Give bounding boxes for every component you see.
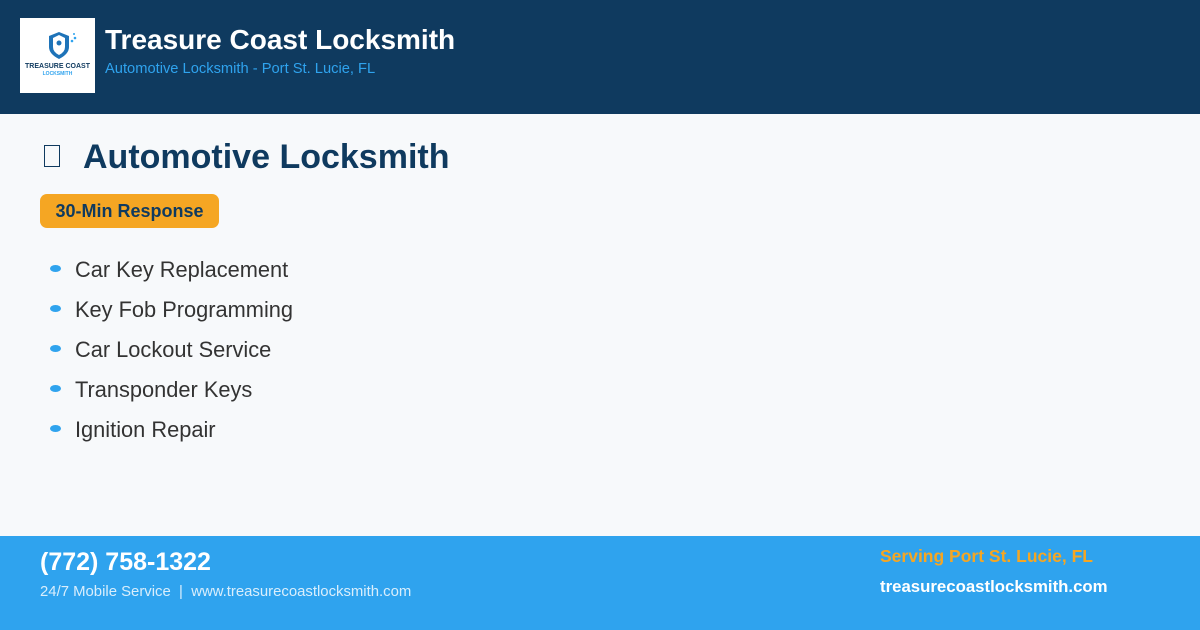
logo: LOCKSMITH <box>43 71 73 77</box>
service list <box>50 257 293 442</box>
service list: Key Fob Programming <box>75 297 293 322</box>
page title: Automotive Locksmith <box>83 138 449 176</box>
header bar <box>0 0 1200 114</box>
brand subtitle: Automotive Locksmith - Port St. Lucie, FL <box>105 61 375 77</box>
badge <box>40 194 219 228</box>
service area: Serving Port St. Lucie, FL <box>880 546 1093 566</box>
phone: (772) 758-1322 <box>40 548 211 576</box>
badge: 30-Min Response <box>55 201 204 221</box>
service list: Ignition Repair <box>75 417 216 442</box>
website: treasurecoastlocksmith.com <box>880 577 1108 596</box>
service list: Car Lockout Service <box>75 337 271 362</box>
logo: TREASURE COAST <box>25 63 91 70</box>
footer subtext: 24/7 Mobile Service | www.treasurecoastlocksmith.com <box>40 584 411 600</box>
footer bar <box>0 536 1200 630</box>
logo <box>20 18 95 93</box>
service list: Car Key Replacement <box>75 257 288 282</box>
brand title: Treasure Coast Locksmith <box>105 24 455 55</box>
service list: Transponder Keys <box>75 377 252 402</box>
